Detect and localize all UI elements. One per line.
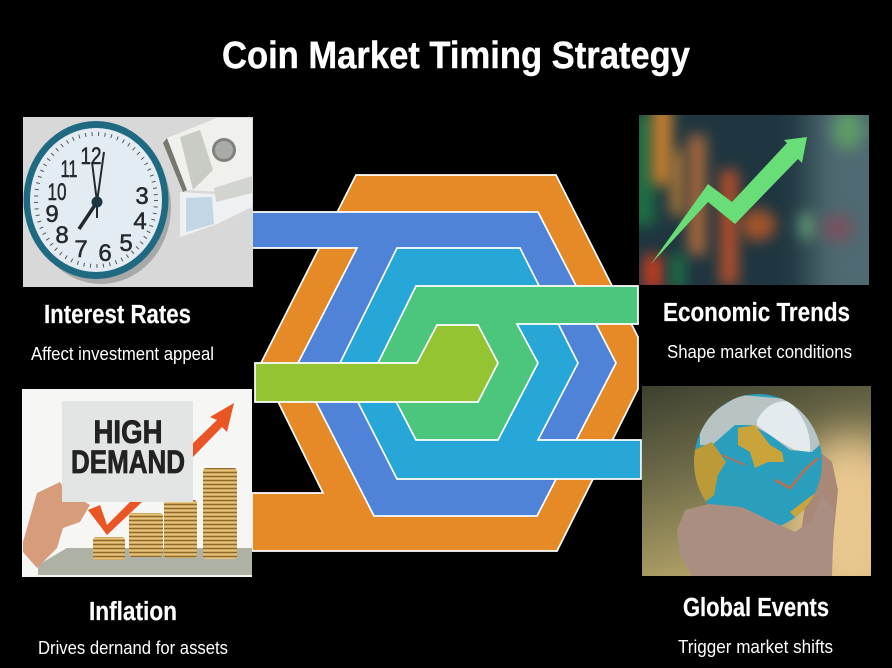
image: clock and money [23, 117, 253, 287]
banknote stack [163, 118, 252, 237]
image: globe in hand [642, 386, 871, 576]
label: interest rates [31, 301, 214, 364]
description: economic trends: Shape market conditions [667, 342, 852, 362]
label: economic trends [663, 299, 852, 362]
description: interest rates: Affect investment appeal [31, 344, 214, 364]
heading: global events: Global Events [683, 594, 829, 622]
globe [694, 394, 825, 530]
green hexagon band [377, 286, 638, 440]
green arrow [651, 137, 807, 264]
lime hexagon arm [255, 325, 498, 402]
heading: inflation: Inflation [89, 598, 177, 626]
clock: 11 [60, 156, 78, 183]
clock: 6 [98, 240, 112, 267]
clock: 8 [55, 222, 69, 249]
clock: 10 [48, 179, 66, 206]
heading: economic trends: Economic Trends [663, 299, 850, 327]
clock: 5 [119, 230, 133, 257]
title: Coin Market Timing Strategy [222, 35, 690, 77]
card [62, 401, 193, 502]
image: high demand [22, 389, 252, 577]
clock: 3 [135, 183, 149, 210]
orange hexagon band [252, 175, 638, 551]
card: DEMAND [71, 444, 185, 480]
cyan hexagon band [339, 248, 641, 479]
label: inflation [38, 598, 228, 658]
image: rising trend chart [639, 115, 869, 285]
blurred market background [639, 115, 869, 285]
clock: 4 [133, 208, 147, 235]
clock [24, 121, 171, 284]
label: global events [678, 594, 833, 657]
description: inflation: Drives dernand for assets [38, 638, 228, 658]
coin stacks [93, 468, 237, 560]
heading: interest rates: Interest Rates [44, 301, 191, 329]
clock: 9 [45, 201, 59, 228]
fingers [802, 454, 838, 550]
clock: 12 [80, 143, 102, 170]
description: global events: Trigger market shifts [678, 637, 833, 657]
hand [23, 482, 90, 568]
hand [677, 495, 834, 576]
blue hexagon band [252, 212, 616, 516]
card: HIGH [94, 414, 162, 450]
money base [38, 548, 252, 575]
rising red arrow [88, 403, 234, 535]
clock: 7 [74, 236, 88, 263]
interlocking hexagon diagram [252, 175, 641, 551]
